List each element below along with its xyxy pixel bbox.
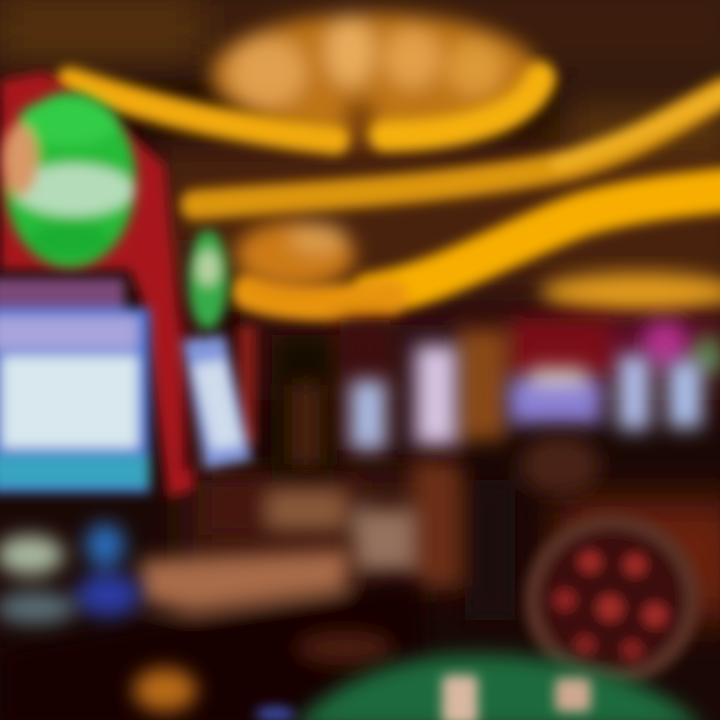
middle light band	[195, 92, 720, 205]
people and mid-floor figures	[205, 435, 600, 620]
second green sign	[188, 230, 228, 330]
lower glow fixture	[235, 221, 355, 289]
second screen	[182, 335, 252, 470]
roulette wheel	[524, 514, 700, 686]
green round sign	[2, 92, 136, 268]
green felt table	[290, 654, 705, 720]
chandelier	[210, 13, 540, 150]
bar counter	[0, 550, 430, 720]
cards on table	[255, 675, 591, 720]
left red machine frame	[0, 72, 256, 498]
back row machines and doorways	[272, 318, 720, 485]
large left screen	[0, 278, 150, 493]
amber glow	[133, 630, 395, 712]
lower light band	[250, 190, 720, 303]
upper yellow light band	[70, 78, 540, 140]
back row screens	[350, 345, 702, 450]
right hand gold fixture	[540, 272, 720, 312]
lower left controls	[0, 523, 140, 624]
